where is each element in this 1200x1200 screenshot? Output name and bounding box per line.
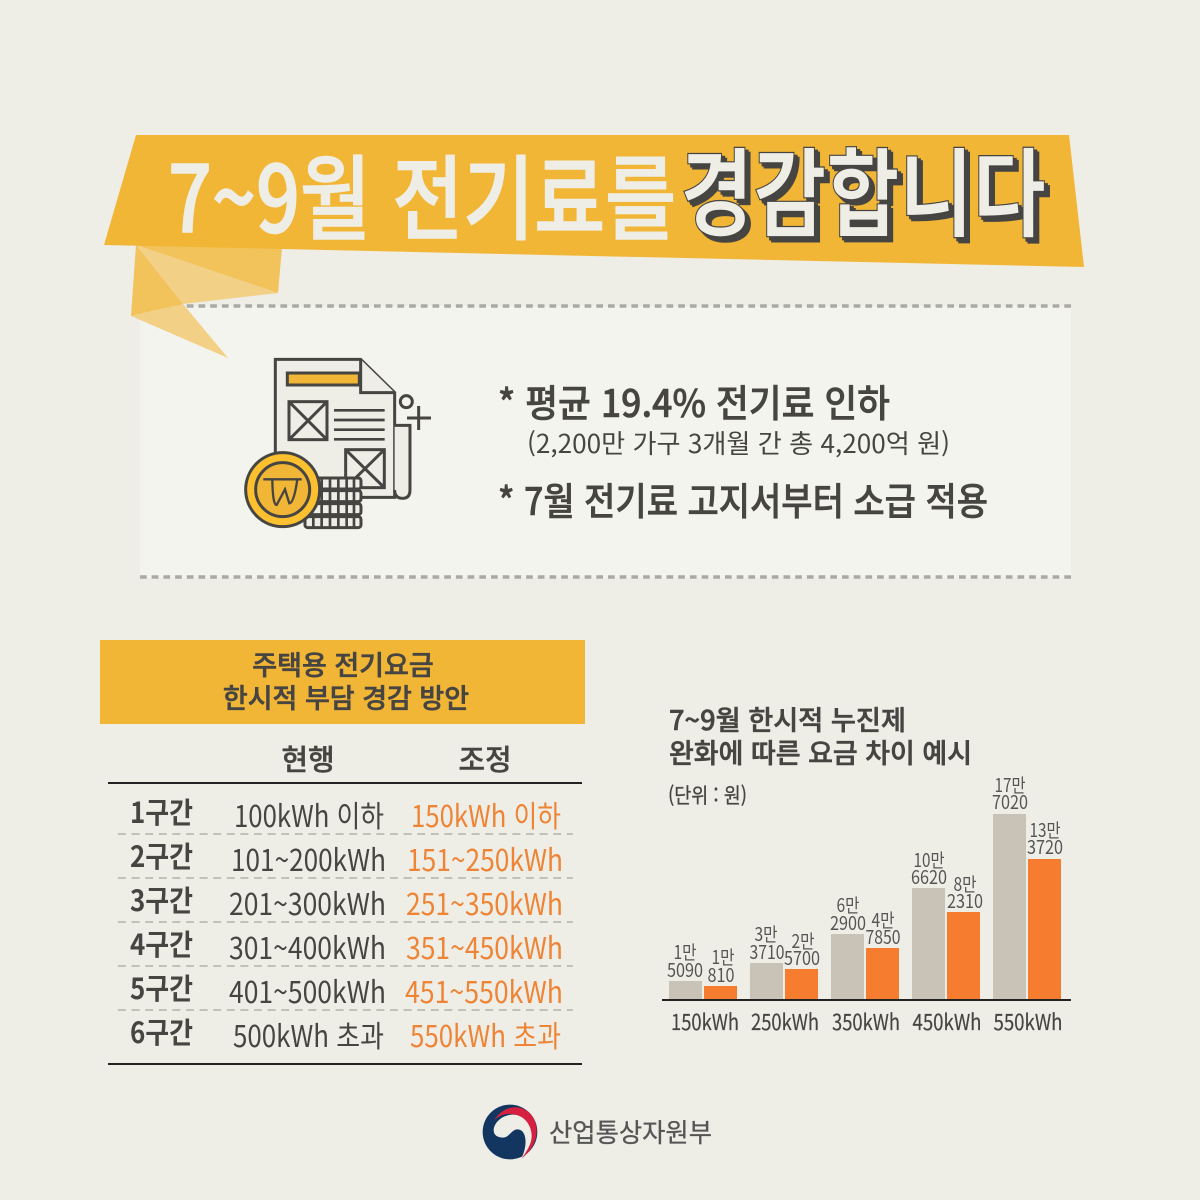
value labels: 3720 [1027, 833, 1063, 860]
title: white text: 7~9월 전기료를 [168, 126, 676, 259]
current brackets: 101~200kWh [231, 836, 386, 880]
current brackets: 500kWh 초과 [233, 1012, 384, 1056]
column headers [281, 737, 512, 779]
chart heading: 완화에 따른 요금 차이 예시 [669, 732, 972, 771]
value labels: 17만 [994, 771, 1026, 798]
adjusted brackets: 251~350kWh [406, 880, 563, 924]
icon: taegeuk emblem [483, 1105, 537, 1159]
adjusted brackets: 150kWh 이하 [411, 792, 561, 836]
axis labels: 150kWh [671, 1005, 739, 1037]
value labels: 1만 [712, 943, 734, 970]
table heading: 한시적 부담 경감 방안 [223, 677, 469, 716]
current brackets: 401~500kWh [229, 968, 386, 1012]
value labels: 13만 [1030, 816, 1060, 843]
adjusted brackets: 550kWh 초과 [410, 1012, 561, 1056]
value labels [667, 771, 1063, 988]
axis labels [671, 1005, 1062, 1037]
value labels: 2900 [830, 909, 866, 936]
value labels: 10만 [914, 846, 944, 873]
table heading: 주택용 전기요금 [252, 644, 434, 683]
value labels: 7850 [866, 923, 900, 950]
text block: key facts [498, 373, 988, 526]
value labels: 7020 [992, 788, 1028, 815]
axis labels: 350kWh [832, 1005, 900, 1037]
text block: key facts: * 7월 전기료 고지서부터 소급 적용 [498, 471, 988, 526]
current brackets [229, 792, 386, 1056]
value labels: 3만 [754, 920, 778, 947]
value labels: 5090 [667, 956, 703, 983]
text block: key facts: * 평균 19.4% 전기료 인하 [498, 373, 890, 428]
value labels: 3710 [750, 938, 784, 965]
value labels: 2310 [947, 887, 983, 914]
text block: key facts: (2,200만 가구 3개월 간 총 4,200억 원) [527, 424, 950, 461]
axis labels: 250kWh [751, 1005, 819, 1037]
adjusted brackets [405, 792, 563, 1056]
adjusted brackets: 451~550kWh [405, 968, 563, 1012]
row labels [130, 790, 193, 1052]
row labels: 4구간 [130, 922, 193, 964]
column headers: 조정 [458, 737, 512, 779]
row labels: 5구간 [130, 966, 193, 1008]
table heading [100, 640, 585, 724]
value labels: 6620 [911, 863, 947, 890]
panel: summary [140, 306, 1071, 578]
value labels: 4만 [872, 906, 894, 933]
current brackets: 301~400kWh [229, 924, 386, 968]
current brackets: 100kWh 이하 [234, 792, 384, 836]
ministry name: 산업통상자원부 [549, 1113, 712, 1150]
current brackets: 201~300kWh [229, 880, 386, 924]
value labels: 2만 [792, 927, 814, 954]
row labels: 1구간 [130, 790, 193, 832]
ministry logo [483, 1105, 712, 1159]
icon: bill and won coins [246, 359, 431, 528]
chart heading: 7~9월 한시적 누진제 [669, 699, 906, 738]
row labels: 6구간 [130, 1010, 193, 1052]
adjusted brackets: 351~450kWh [406, 924, 563, 968]
axis labels: 550kWh [994, 1005, 1062, 1037]
value labels: 8만 [954, 870, 976, 897]
row labels: 2구간 [130, 834, 193, 876]
column headers: 현행 [281, 737, 335, 779]
title: emphasized text: 경감합니다 [683, 119, 1049, 260]
title: emphasized text: 경감합니다 [680, 116, 1046, 257]
value labels: 810 [708, 961, 734, 988]
title: emphasized text: 경감합니다 [685, 121, 1051, 262]
value labels: 5700 [784, 944, 820, 971]
adjusted brackets: 151~250kWh [407, 836, 563, 880]
ribbon fold [131, 245, 282, 358]
row labels: 3구간 [130, 878, 193, 920]
value labels: 6만 [836, 891, 860, 918]
chart heading [668, 699, 972, 810]
chart heading: (단위 : 원) [668, 780, 747, 810]
table: rate brackets [108, 737, 582, 1064]
value labels: 1만 [674, 938, 696, 965]
title banner [104, 116, 1084, 267]
bar chart [662, 771, 1071, 1037]
axis labels: 450kWh [912, 1005, 982, 1037]
